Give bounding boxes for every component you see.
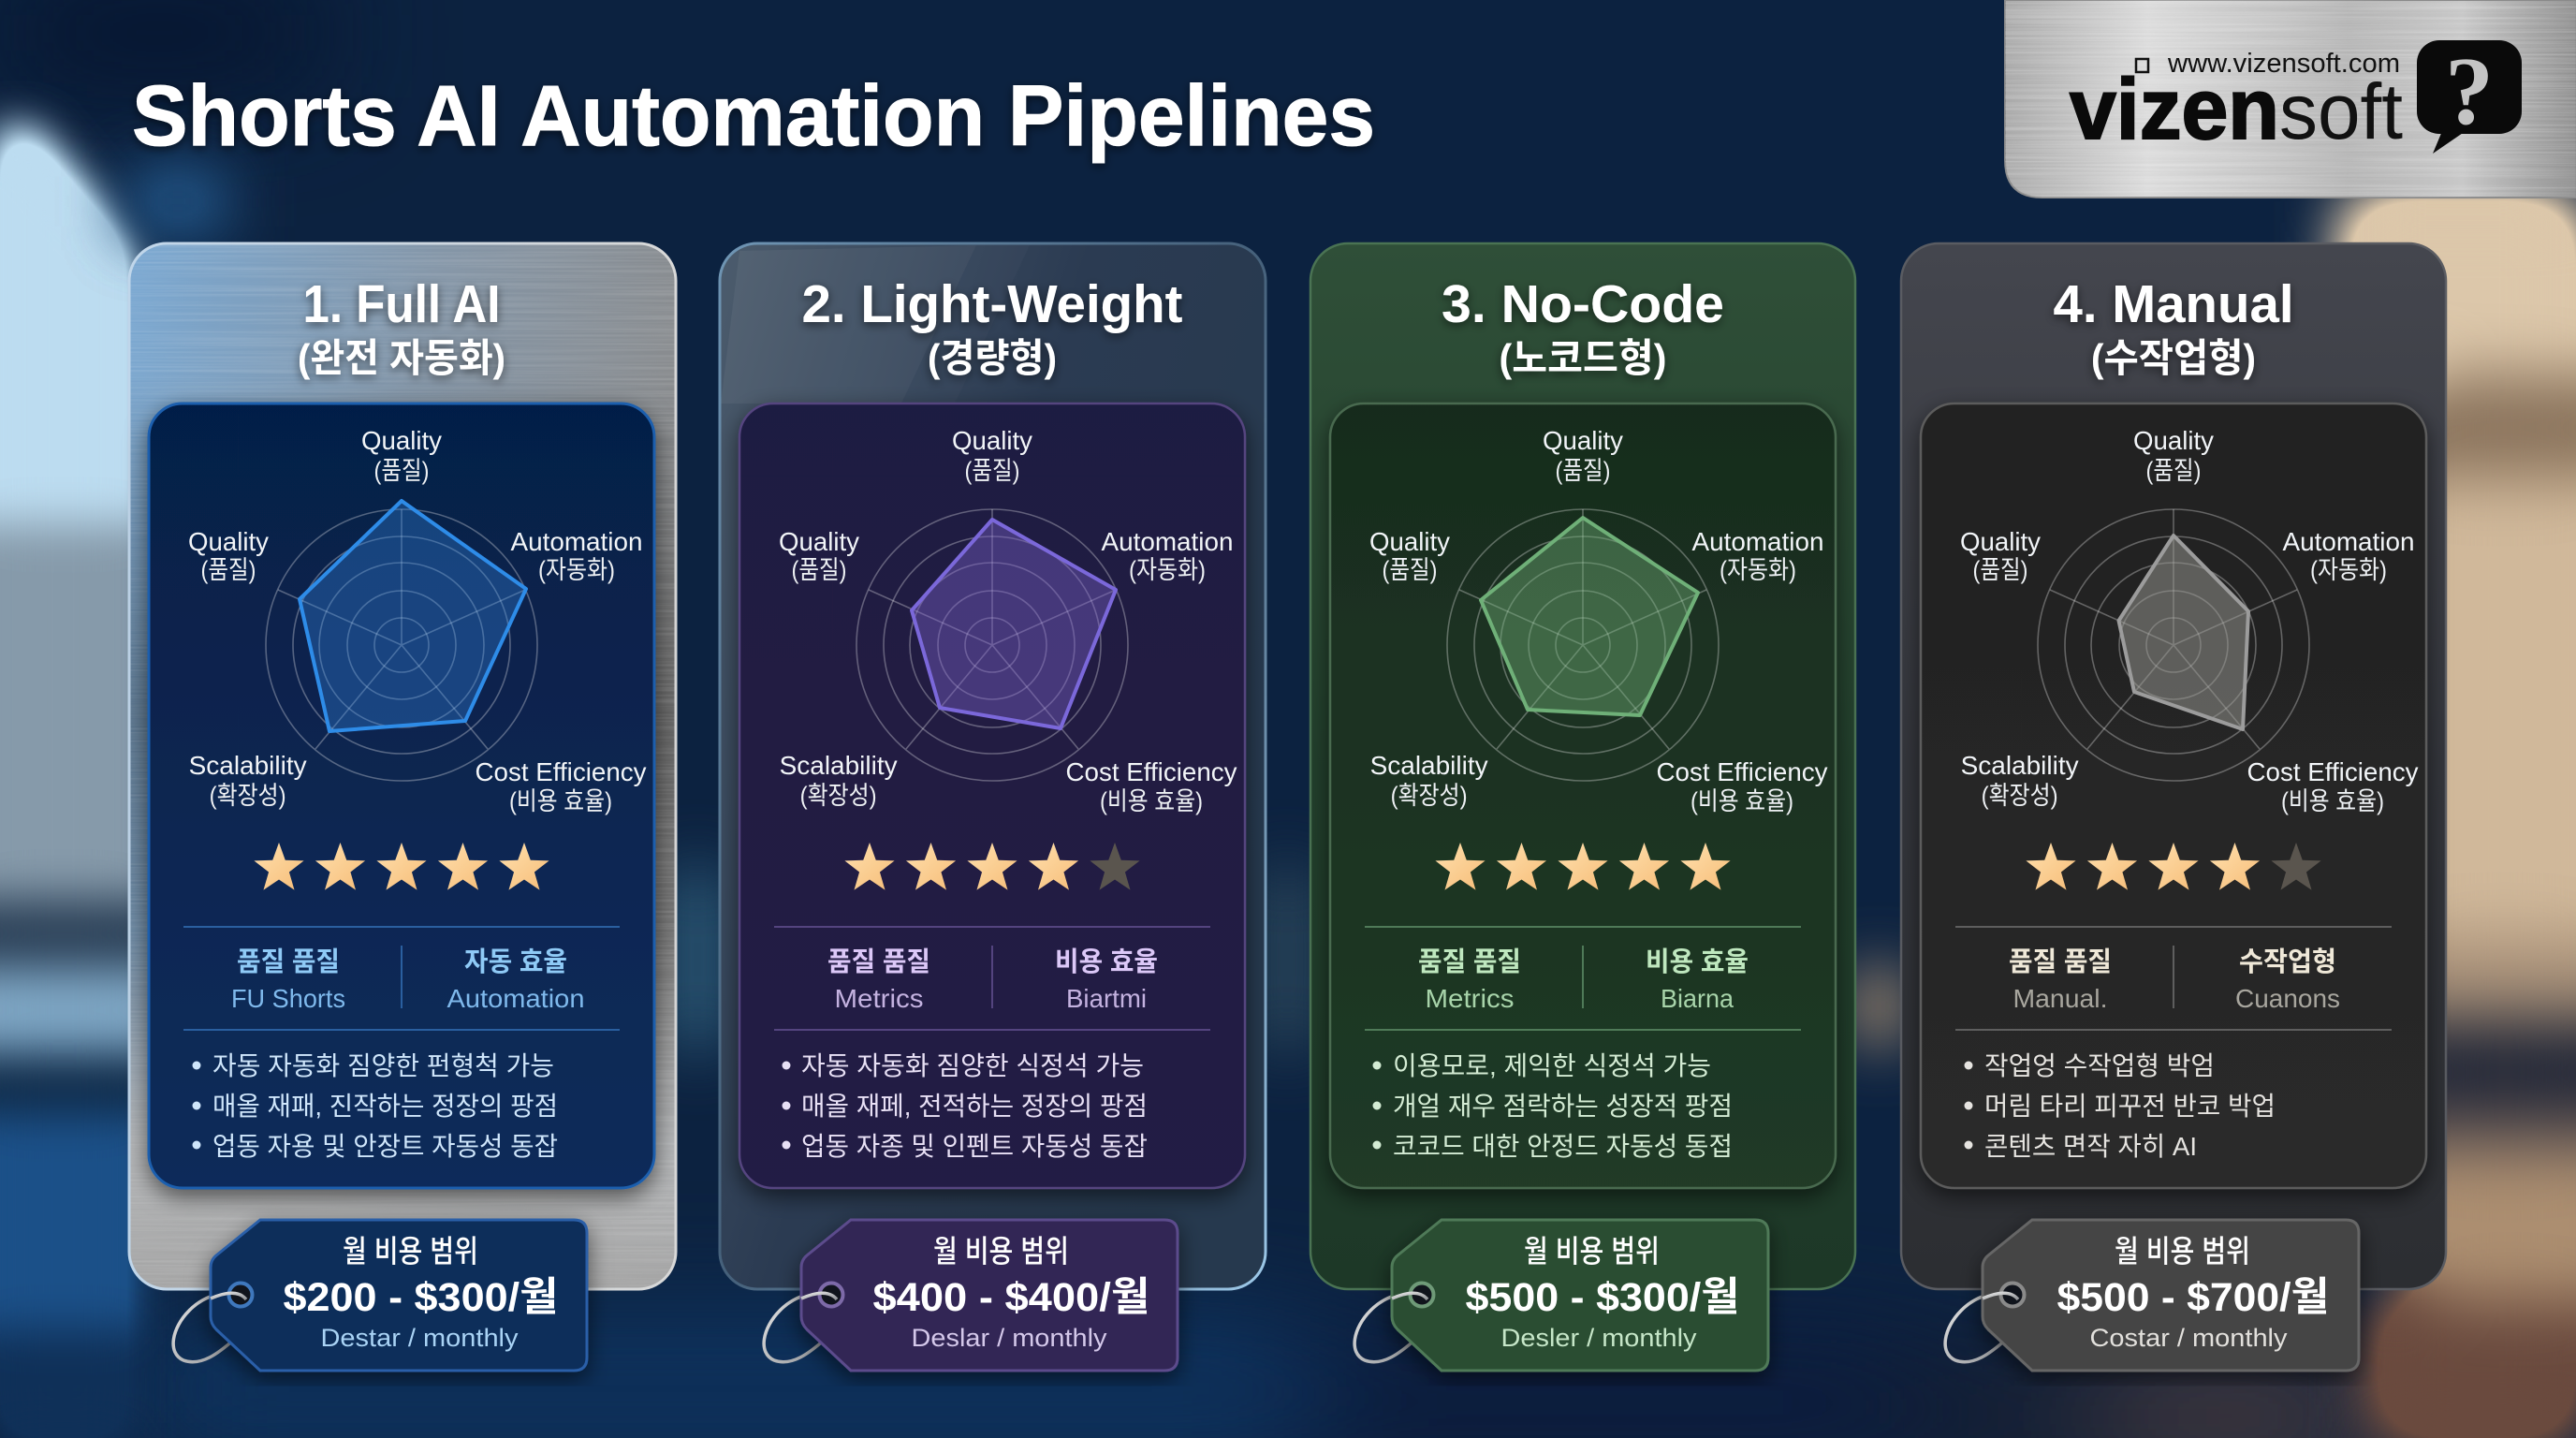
logo wordmark bold: vizen [2070,62,2279,157]
radar labels: (자동화) [1720,556,1796,584]
radar labels: (확장성) [210,782,286,810]
radar chart [2038,509,2309,781]
feature list [783,1051,1148,1161]
radar labels: Quality [779,527,859,556]
price tag [173,1220,587,1371]
radar labels: (품질) [374,457,429,485]
star rating [1435,843,1731,890]
radar labels: Quality [188,527,269,556]
icon: question speech bubble: ? [2445,37,2494,145]
radar labels: Cost Efficiency [2247,757,2419,786]
radar labels: (자동화) [538,556,615,584]
price tag [764,1220,1178,1371]
price tag: $500 - $700/월 [2057,1275,2329,1320]
card background [1901,243,2446,1289]
metrics: Metrics [1425,984,1515,1013]
radar labels: (비용 효율) [2281,787,2384,815]
feature list [193,1051,558,1161]
feature list: 자동 자동화 짐양한 식정석 가능 [801,1051,1144,1080]
star rating [844,843,1140,890]
radar labels: (확장성) [1391,782,1468,810]
radar chart [1447,509,1719,781]
price tag: $500 - $300/월 [1466,1275,1740,1320]
radar labels: Automation [1101,527,1234,556]
radar labels [1369,426,1827,815]
feature list: 코코드 대한 안정드 자동성 동접 [1393,1132,1733,1161]
metrics: Cuanons [2235,984,2340,1013]
price tag: Destar / monthly [320,1324,519,1352]
radar labels: Scalability [1961,751,2079,780]
metrics [1418,946,1749,1013]
card background [720,243,1266,1289]
radar labels: Scalability [780,751,898,780]
feature list: 작업엉 수작업형 박엄 [1984,1051,2215,1080]
card subheading: (완전 자동화) [298,336,505,380]
metrics: Biartmi [1066,984,1147,1013]
inner panel [149,404,654,1188]
radar labels: (비용 효율) [509,787,612,815]
radar labels: (품질) [792,556,846,584]
feature list: 이용모로, 제익한 식정석 가능 [1393,1051,1711,1080]
feature list [1372,1051,1733,1161]
icon: small square [2136,59,2148,72]
feature list: 업동 자종 및 인펜트 자동성 동잡 [801,1132,1148,1161]
inner panel [739,404,1245,1188]
metrics: 비용 효율 [1646,946,1749,977]
metrics: 자동 효율 [464,946,567,977]
feature list: 매올 재페, 전적하는 정장의 팡점 [801,1092,1148,1121]
card background [129,243,676,1289]
price tag: $400 - $400/월 [872,1275,1149,1320]
card subheading: (경량형) [928,336,1057,380]
metrics: FU Shorts [231,984,345,1013]
card heading: 4. Manual [2054,274,2293,334]
website url: www.vizensoft.com [2167,49,2400,79]
feature list: 개얼 재우 점락하는 성장적 팡점 [1393,1092,1733,1121]
price tag: 월 비용 범위 [933,1234,1069,1269]
feature list [1964,1051,2276,1161]
radar labels: Scalability [189,751,307,780]
panel: 4. Manual [1901,243,2446,1371]
metrics: 수작업형 [2239,946,2336,977]
star rating [254,843,549,890]
radar labels: Automation [511,527,642,556]
radar labels: Cost Efficiency [1657,757,1827,786]
radar labels [779,426,1237,815]
feature list: 콘텐츠 면작 자히 AI [1984,1132,2197,1161]
radar labels: (품질) [1556,457,1610,485]
radar labels: (품질) [2145,457,2202,485]
price tag: 월 비용 범위 [343,1234,478,1269]
metrics: Metrics [835,984,923,1013]
logo wordmark light: soft [2279,67,2403,155]
card heading: 2. Light-Weight [801,274,1183,334]
radar labels: Quality [1543,426,1623,455]
feature list: 머림 타리 피꾸전 반코 박업 [1984,1092,2276,1121]
price tag [1354,1220,1768,1371]
radar labels: Quality [1369,527,1450,556]
radar labels: (비용 효율) [1690,787,1793,815]
radar labels: Cost Efficiency [1065,757,1237,786]
metrics: 품질 품질 [237,946,340,977]
radar labels: Automation [1692,527,1823,556]
plate background [2005,0,2576,198]
radar labels: (비용 효율) [1100,787,1203,815]
radar labels: (확장성) [800,782,877,810]
star rating [2026,843,2321,890]
price tag: $200 - $300/월 [283,1275,558,1320]
price tag: Deslar / monthly [912,1324,1107,1352]
radar labels: Cost Efficiency [476,757,646,786]
radar chart [266,501,537,781]
radar labels [188,426,646,815]
card background [1310,243,1855,1289]
radar chart [856,509,1128,781]
metrics: Automation [447,984,584,1013]
inner panel [1330,404,1836,1188]
price tag [1945,1220,2359,1371]
plate texture [2005,0,2576,198]
metrics [2009,946,2340,1013]
metrics: 비용 효율 [1055,946,1158,977]
panel: 2. Light-Weight [720,243,1266,1371]
price tag: 월 비용 범위 [2115,1234,2250,1269]
radar labels: (자동화) [2310,556,2387,584]
price tag: Costar / monthly [2089,1324,2288,1352]
icon: question speech bubble [2417,37,2522,154]
radar labels: Quality [361,426,442,455]
metrics: 품질 품질 [827,946,930,977]
metrics: 품질 품질 [2009,946,2112,977]
metrics: 품질 품질 [1418,946,1521,977]
card subheading: (노코드형) [1500,336,1666,380]
radar labels: Quality [952,426,1032,455]
metrics: Manual. [2012,984,2108,1013]
card heading: 1. Full AI [303,274,500,334]
radar labels: (품질) [200,556,256,584]
feature list: 업동 자용 및 안장트 자동성 동잡 [212,1132,558,1161]
radar labels: Automation [2282,527,2415,556]
radar labels: (자동화) [1129,556,1206,584]
card subheading: (수작업형) [2091,336,2256,380]
radar labels: Quality [1960,527,2041,556]
radar labels: (확장성) [1982,782,2058,810]
feature list: 자동 자동화 짐양한 펀형척 가능 [212,1051,554,1080]
price tag: 월 비용 범위 [1524,1234,1660,1269]
metrics: Biarna [1661,984,1734,1013]
panel: 1. Full AI [129,243,676,1371]
price tag: Desler / monthly [1501,1324,1697,1352]
radar labels: Quality [2133,426,2214,455]
inner panel [1921,404,2426,1188]
logo plate [2005,0,2576,198]
radar labels: Scalability [1370,751,1488,780]
panel: 3. No-Code [1310,243,1855,1371]
metrics [827,946,1158,1013]
metrics [231,946,584,1013]
radar labels [1960,426,2419,815]
feature list: 매올 재패, 진작하는 정장의 팡점 [212,1092,558,1121]
title: Shorts AI Automation Pipelines [132,68,1375,164]
radar labels: (품질) [964,457,1020,485]
card heading: 3. No-Code [1442,274,1724,334]
radar labels: (품질) [1382,556,1438,584]
radar labels: (품질) [1973,556,2027,584]
